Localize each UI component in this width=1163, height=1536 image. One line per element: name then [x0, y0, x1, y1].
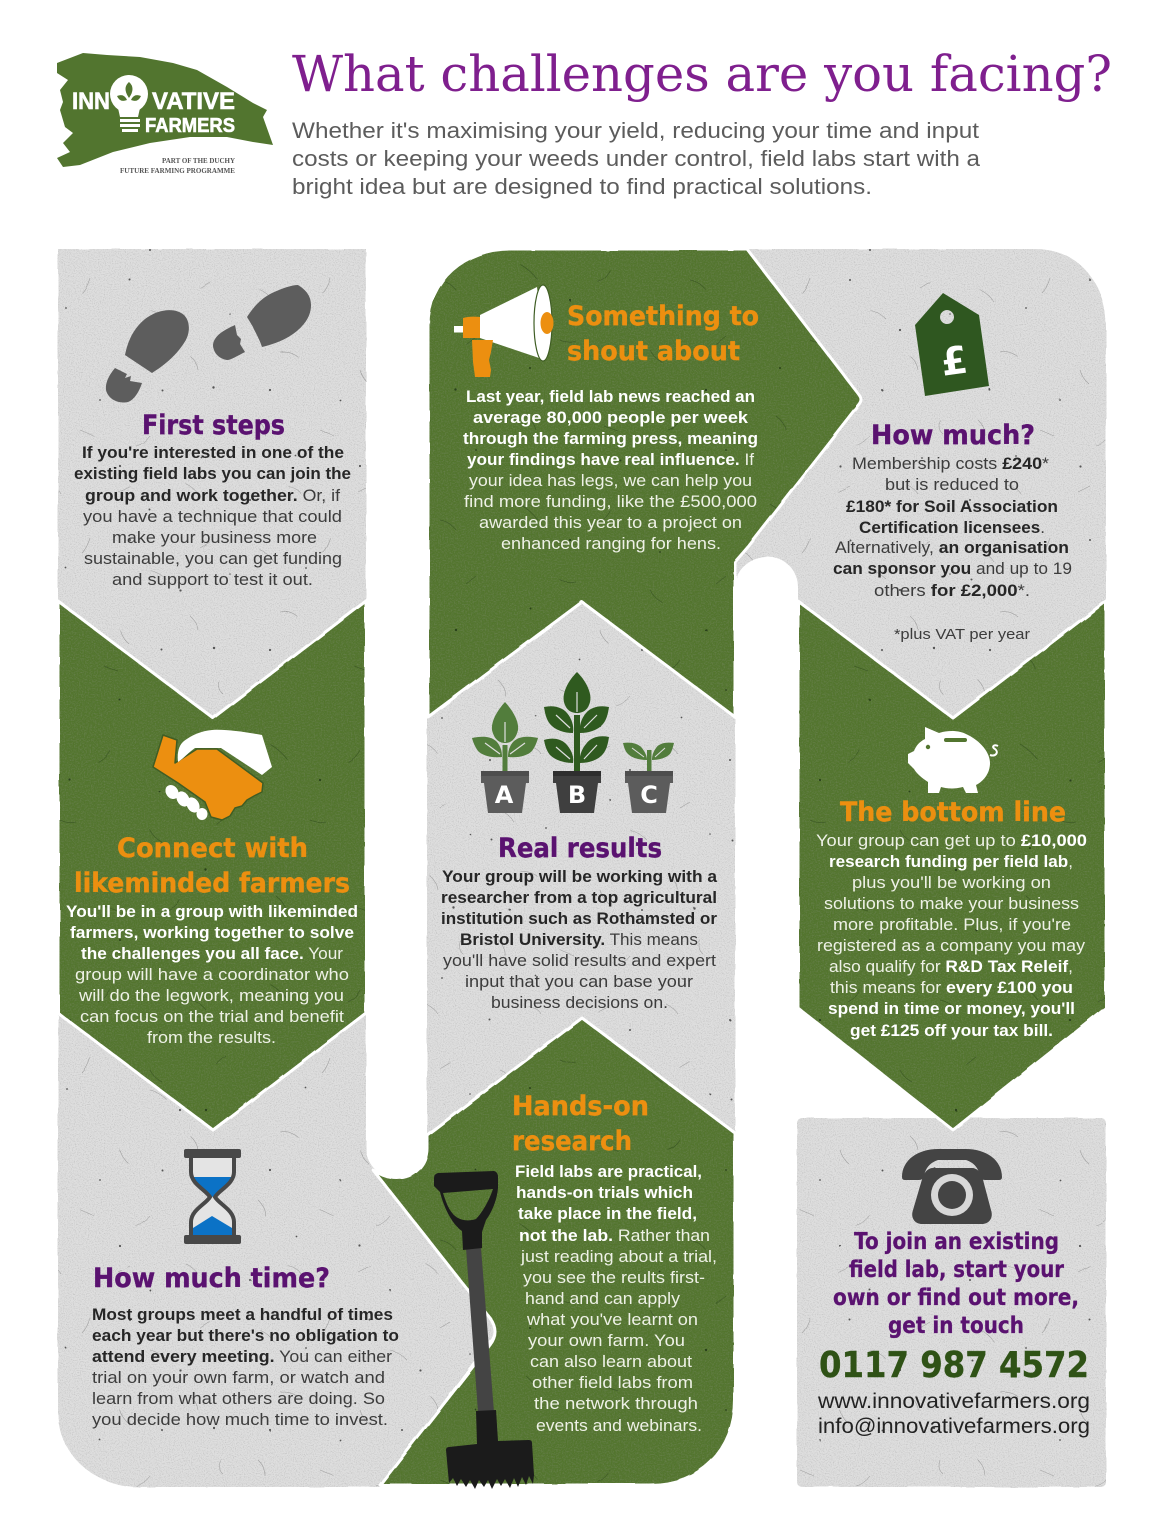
- icon: pot C: [625, 771, 673, 813]
- body text: If you're interested in one of the: [82, 444, 344, 462]
- body text: events and webinars.: [536, 1417, 702, 1435]
- body text: farmers, working together to solve: [70, 924, 354, 942]
- body text: through the farming press, meaning: [463, 430, 758, 448]
- body text: you have a technique that could: [83, 508, 342, 526]
- heading: [512, 1091, 649, 1157]
- icon: plant A: [472, 702, 538, 772]
- body text: existing field labs you can join the: [74, 465, 351, 483]
- body text: [816, 832, 1087, 1040]
- body text: will do the legwork, meaning you: [78, 987, 344, 1005]
- body text: just reading about a trial,: [520, 1248, 717, 1266]
- call to action: field lab, start your: [849, 1257, 1065, 1283]
- title: What challenges are you facing?: [292, 45, 1112, 103]
- body text: can sponsor you and up to 19: [833, 560, 1072, 578]
- body text: [441, 868, 718, 1012]
- logo wordmark: FARMERS: [145, 115, 235, 137]
- web and email: www.innovativefarmers.org: [817, 1390, 1090, 1413]
- panel: how much time: [92, 1149, 399, 1429]
- panel: first steps: [74, 285, 351, 589]
- icon: pot B: [553, 771, 601, 813]
- body text: Field labs are practical,: [515, 1163, 702, 1181]
- panel: how much: [833, 293, 1072, 643]
- heading: [567, 301, 759, 367]
- body text: not the lab. Rather than: [519, 1227, 710, 1245]
- icon: hourglass: [184, 1149, 241, 1244]
- body text: £180* for Soil Association: [846, 498, 1058, 516]
- heading: First steps: [142, 410, 285, 441]
- body text: spend in time or money, you'll: [828, 1000, 1075, 1018]
- phone number: 0117 987 4572: [819, 1345, 1089, 1386]
- panel: hands-on research: [434, 1091, 717, 1489]
- logo lightbulb: [110, 75, 148, 132]
- logo wordmark: VATIVE: [152, 88, 235, 115]
- pot label A: A: [495, 781, 514, 809]
- body text: [463, 388, 758, 553]
- call to action: own or find out more,: [833, 1285, 1079, 1311]
- body text: your own farm. You: [528, 1332, 685, 1350]
- body text: You'll be in a group with likeminded: [66, 903, 358, 921]
- body text: this means for every £100 you: [830, 979, 1073, 997]
- body text: find more funding, like the £500,000: [464, 493, 757, 511]
- icon: telephone: [902, 1149, 1002, 1224]
- body text: take place in the field,: [518, 1205, 697, 1223]
- call to action: [833, 1229, 1079, 1339]
- web and email: [817, 1390, 1090, 1438]
- body text: Certification licensees .: [859, 519, 1045, 537]
- body text: and support to test it out.: [112, 571, 313, 589]
- icon: plant C: [623, 743, 674, 771]
- icon: megaphone: [454, 285, 554, 377]
- body text: Last year, field lab news reached an: [466, 388, 755, 406]
- pot label B: B: [568, 781, 586, 809]
- body text: the network through: [534, 1395, 698, 1413]
- body text: sustainable, you can get funding: [84, 550, 342, 568]
- icon: piggy bank: [908, 727, 998, 793]
- body text: hands-on trials which: [516, 1184, 693, 1202]
- body text: Most groups meet a handful of times: [92, 1306, 393, 1324]
- intro paragraph: bright idea but are designed to find practical solutions.: [292, 174, 872, 199]
- body text: [74, 444, 351, 589]
- heading: Connect with: [117, 833, 308, 864]
- intro paragraph: Whether it's maximising your yield, reducing your time and input: [292, 118, 979, 143]
- pot label C: C: [640, 781, 658, 809]
- body text: more profitable. Plus, if you're: [833, 916, 1071, 934]
- green band: hands-on research: [373, 1018, 735, 1485]
- body text: [92, 1306, 399, 1429]
- heading: shout about: [567, 336, 740, 367]
- body text: research funding per field lab ,: [829, 853, 1073, 871]
- body text: others for £2,000 *.: [874, 582, 1030, 600]
- body text: input that you can base your: [465, 973, 694, 991]
- body text: can also learn about: [530, 1353, 692, 1371]
- body text: [833, 455, 1072, 600]
- body text: trial on your own farm, or watch and: [92, 1369, 385, 1387]
- heading: research: [512, 1126, 632, 1157]
- icon: footprints: [106, 285, 311, 402]
- body text: what you've learnt on: [526, 1311, 698, 1329]
- panel: the bottom line: [816, 727, 1087, 1040]
- logo wordmark: INN: [72, 88, 110, 115]
- intro paragraph: costs or keeping your weeds under control, field labs start with a: [292, 146, 981, 171]
- panel: real results: [441, 672, 718, 1012]
- body text: [66, 903, 358, 1047]
- body text: you'll have solid results and expert: [443, 952, 716, 970]
- body text: your idea has legs, we can help you: [469, 472, 752, 490]
- heading: Something to: [567, 301, 759, 332]
- heading: [74, 833, 350, 899]
- logo brush stroke: [57, 53, 273, 167]
- panel: connect with likeminded farmers: [66, 730, 358, 1047]
- icon: pot A: [481, 771, 529, 813]
- body text: also qualify for R&D Tax Releif ,: [829, 958, 1073, 976]
- body text: each year but there's no obligation to: [92, 1327, 399, 1345]
- body text: solutions to make your business: [824, 895, 1079, 913]
- body text: can focus on the trial and benefit: [80, 1008, 344, 1026]
- logo: Innovative Farmers: [57, 53, 273, 175]
- body text: business decisions on.: [491, 994, 668, 1012]
- panel: something to shout about: [454, 285, 759, 553]
- heading: Hands-on: [512, 1091, 649, 1122]
- body text: Your group can get up to £10,000: [816, 832, 1087, 850]
- body text: institution such as Rothamsted or: [441, 910, 718, 928]
- body text: group will have a coordinator who: [75, 966, 349, 984]
- body text: average 80,000 people per week: [473, 409, 749, 427]
- body text: hand and can apply: [525, 1290, 681, 1308]
- body text: awarded this year to a project on: [479, 514, 742, 532]
- icon: spade: [434, 1171, 534, 1489]
- icon: price tag: £: [938, 337, 970, 385]
- body text: other field labs from: [532, 1374, 693, 1392]
- heading: Real results: [498, 833, 662, 864]
- body text: Alternatively, an organisation: [835, 539, 1069, 557]
- icon: plant pots A B C: [472, 672, 674, 813]
- body text: group and work together. Or, if: [85, 487, 340, 505]
- body text: researcher from a top agricultural: [441, 889, 717, 907]
- icon: plant B: [544, 672, 609, 771]
- body text: plus you'll be working on: [852, 874, 1051, 892]
- body text: [515, 1163, 717, 1435]
- body text: Membership costs £240*: [852, 455, 1050, 473]
- logo: Innovative Farmers: FUTURE FARMING PROGRAMME: [120, 166, 235, 175]
- heading: How much time?: [93, 1263, 330, 1294]
- body text: you see the reults first-: [523, 1269, 705, 1287]
- grey contact panel background: [797, 1118, 1106, 1487]
- footnote: *plus VAT per year: [894, 626, 1030, 643]
- grey paper path background: [58, 249, 1106, 1487]
- web and email: info@innovativefarmers.org: [818, 1415, 1090, 1438]
- body text: the challenges you all face. Your: [81, 945, 344, 963]
- intro paragraph: [292, 118, 981, 199]
- body text: registered as a company you may: [817, 937, 1086, 955]
- panel: contact: [817, 1149, 1090, 1438]
- heading: likeminded farmers: [74, 868, 350, 899]
- body text: your findings have real influence. If: [467, 451, 754, 469]
- body text: attend every meeting. You can either: [92, 1348, 393, 1366]
- body text: get £125 off your tax bill.: [850, 1022, 1053, 1040]
- body text: learn from what others are doing. So: [92, 1390, 385, 1408]
- body text: Your group will be working with a: [442, 868, 718, 886]
- call to action: To join an existing: [854, 1229, 1059, 1255]
- body text: from the results.: [147, 1029, 276, 1047]
- body text: enhanced ranging for hens.: [501, 535, 721, 553]
- heading: How much?: [871, 420, 1035, 451]
- icon: handshake: [153, 730, 272, 820]
- body text: you decide how much time to invest.: [92, 1411, 388, 1429]
- body text: make your business more: [112, 529, 317, 547]
- green band: the bottom line: [798, 601, 1106, 1130]
- heading: The bottom line: [840, 797, 1066, 828]
- body text: but is reduced to: [885, 476, 1019, 494]
- icon: price tag: [915, 293, 989, 396]
- logo wordmark: [72, 88, 235, 137]
- logo strapline: PART OF THE DUCHY: [162, 156, 236, 165]
- body text: Bristol University. This means: [460, 931, 698, 949]
- green band: something to shout about: [428, 249, 862, 717]
- call to action: get in touch: [888, 1313, 1024, 1339]
- green band: connect with likeminded farmers: [58, 601, 366, 1130]
